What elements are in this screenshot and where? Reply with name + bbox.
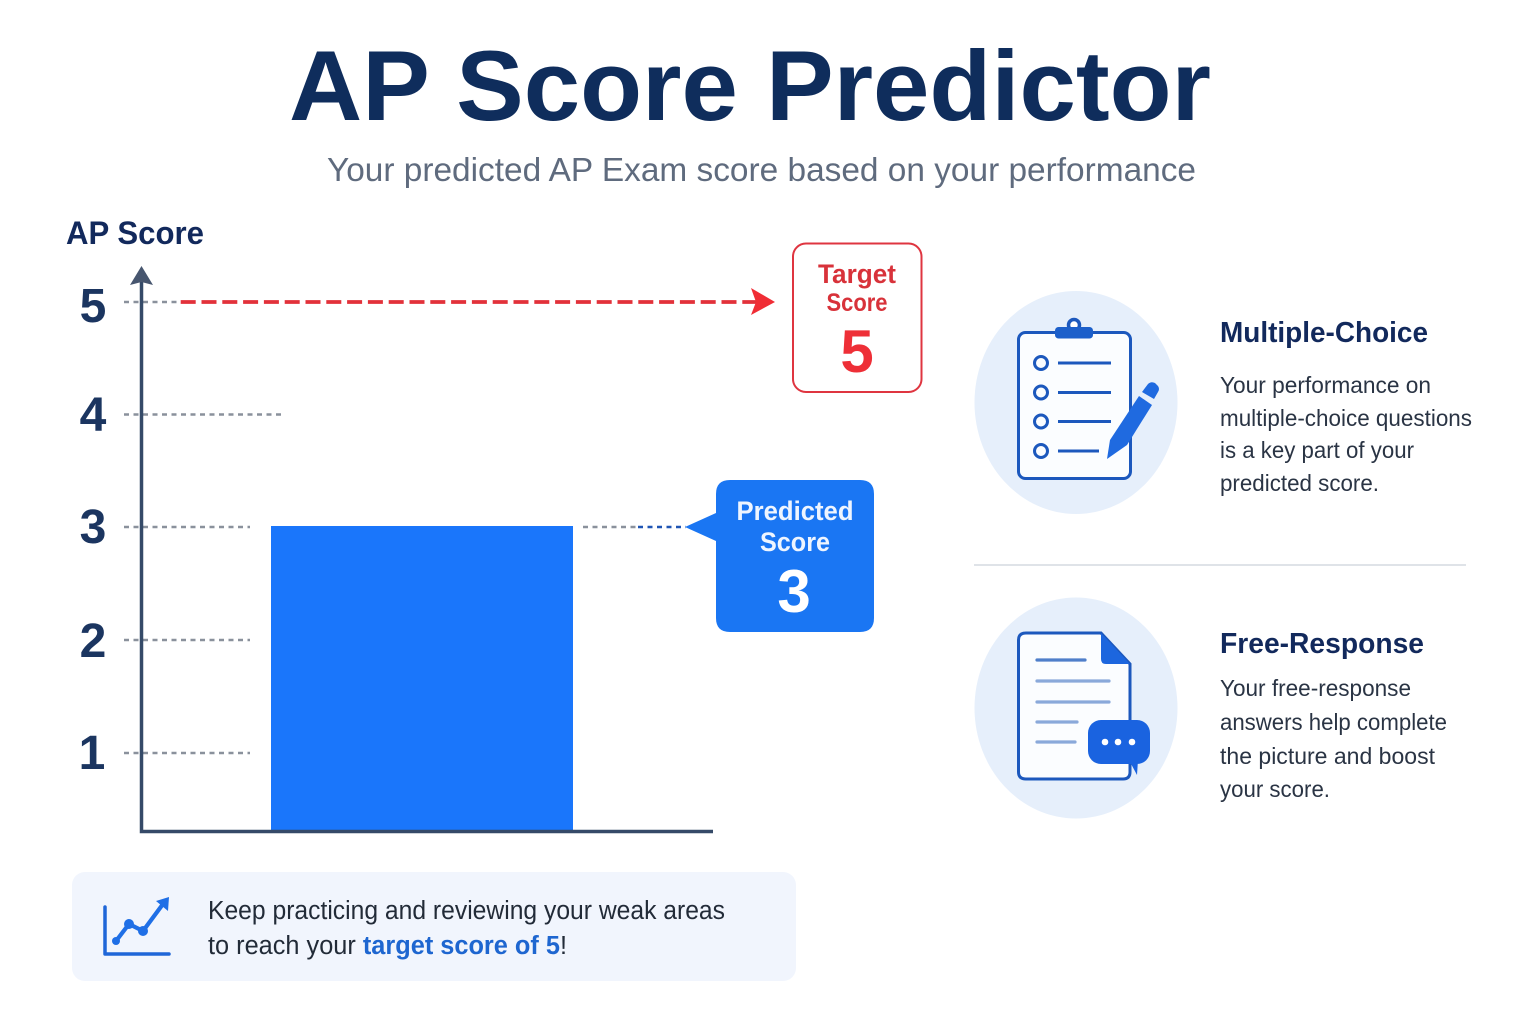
description	[1220, 372, 1472, 496]
chart: AP score bar chart	[66, 215, 922, 832]
description: predicted score.	[1220, 470, 1379, 496]
target score box: Score	[826, 289, 888, 317]
heading: Free-Response	[1220, 628, 1424, 660]
divider	[974, 564, 1466, 566]
description: is a key part of your	[1220, 437, 1414, 463]
icon: rising line chart	[105, 897, 169, 954]
predicted score callout: Predicted	[736, 496, 854, 526]
panel: multiple-choice	[974, 291, 1472, 514]
predicted score callout	[685, 480, 874, 632]
icon: clipboard checklist with pencil	[974, 291, 1178, 514]
y-axis tick labels: 3	[80, 501, 106, 554]
predicted score callout: 3	[777, 558, 811, 625]
predicted score connector	[583, 526, 686, 528]
predicted score bar	[271, 526, 573, 831]
description: the picture and boost	[1220, 743, 1435, 769]
target score box: 5	[840, 318, 874, 385]
axes	[130, 266, 713, 832]
title: AP Score Predictor	[289, 30, 1211, 141]
note text	[208, 897, 725, 960]
description: answers help complete	[1220, 709, 1447, 735]
panel: encouragement note	[72, 872, 796, 981]
panel: free-response	[974, 598, 1447, 818]
target score dashed arrow	[181, 288, 775, 315]
y-axis tick labels	[79, 280, 107, 780]
icon: document with speech bubble	[974, 598, 1178, 818]
predicted score callout: Score	[760, 527, 830, 557]
note text: Keep practicing and reviewing your weak areas	[208, 897, 725, 925]
y-axis tick labels: 4	[80, 389, 107, 442]
description: Your performance on	[1220, 372, 1431, 398]
axis title: AP Score	[66, 215, 204, 251]
description: your score.	[1220, 776, 1330, 802]
target score box: Target	[818, 259, 896, 289]
note text: to reach your target score of 5!	[208, 932, 567, 960]
y-axis tick labels: 1	[79, 727, 105, 780]
description: Your free-response	[1220, 675, 1411, 701]
target score box	[793, 244, 922, 392]
y-axis tick labels: 2	[80, 615, 106, 668]
y-axis tick labels: 5	[80, 280, 106, 333]
subtitle: Your predicted AP Exam score based on your performance	[327, 151, 1196, 188]
heading: Multiple-Choice	[1220, 317, 1428, 349]
description: multiple-choice questions	[1220, 405, 1472, 431]
description	[1220, 675, 1447, 802]
